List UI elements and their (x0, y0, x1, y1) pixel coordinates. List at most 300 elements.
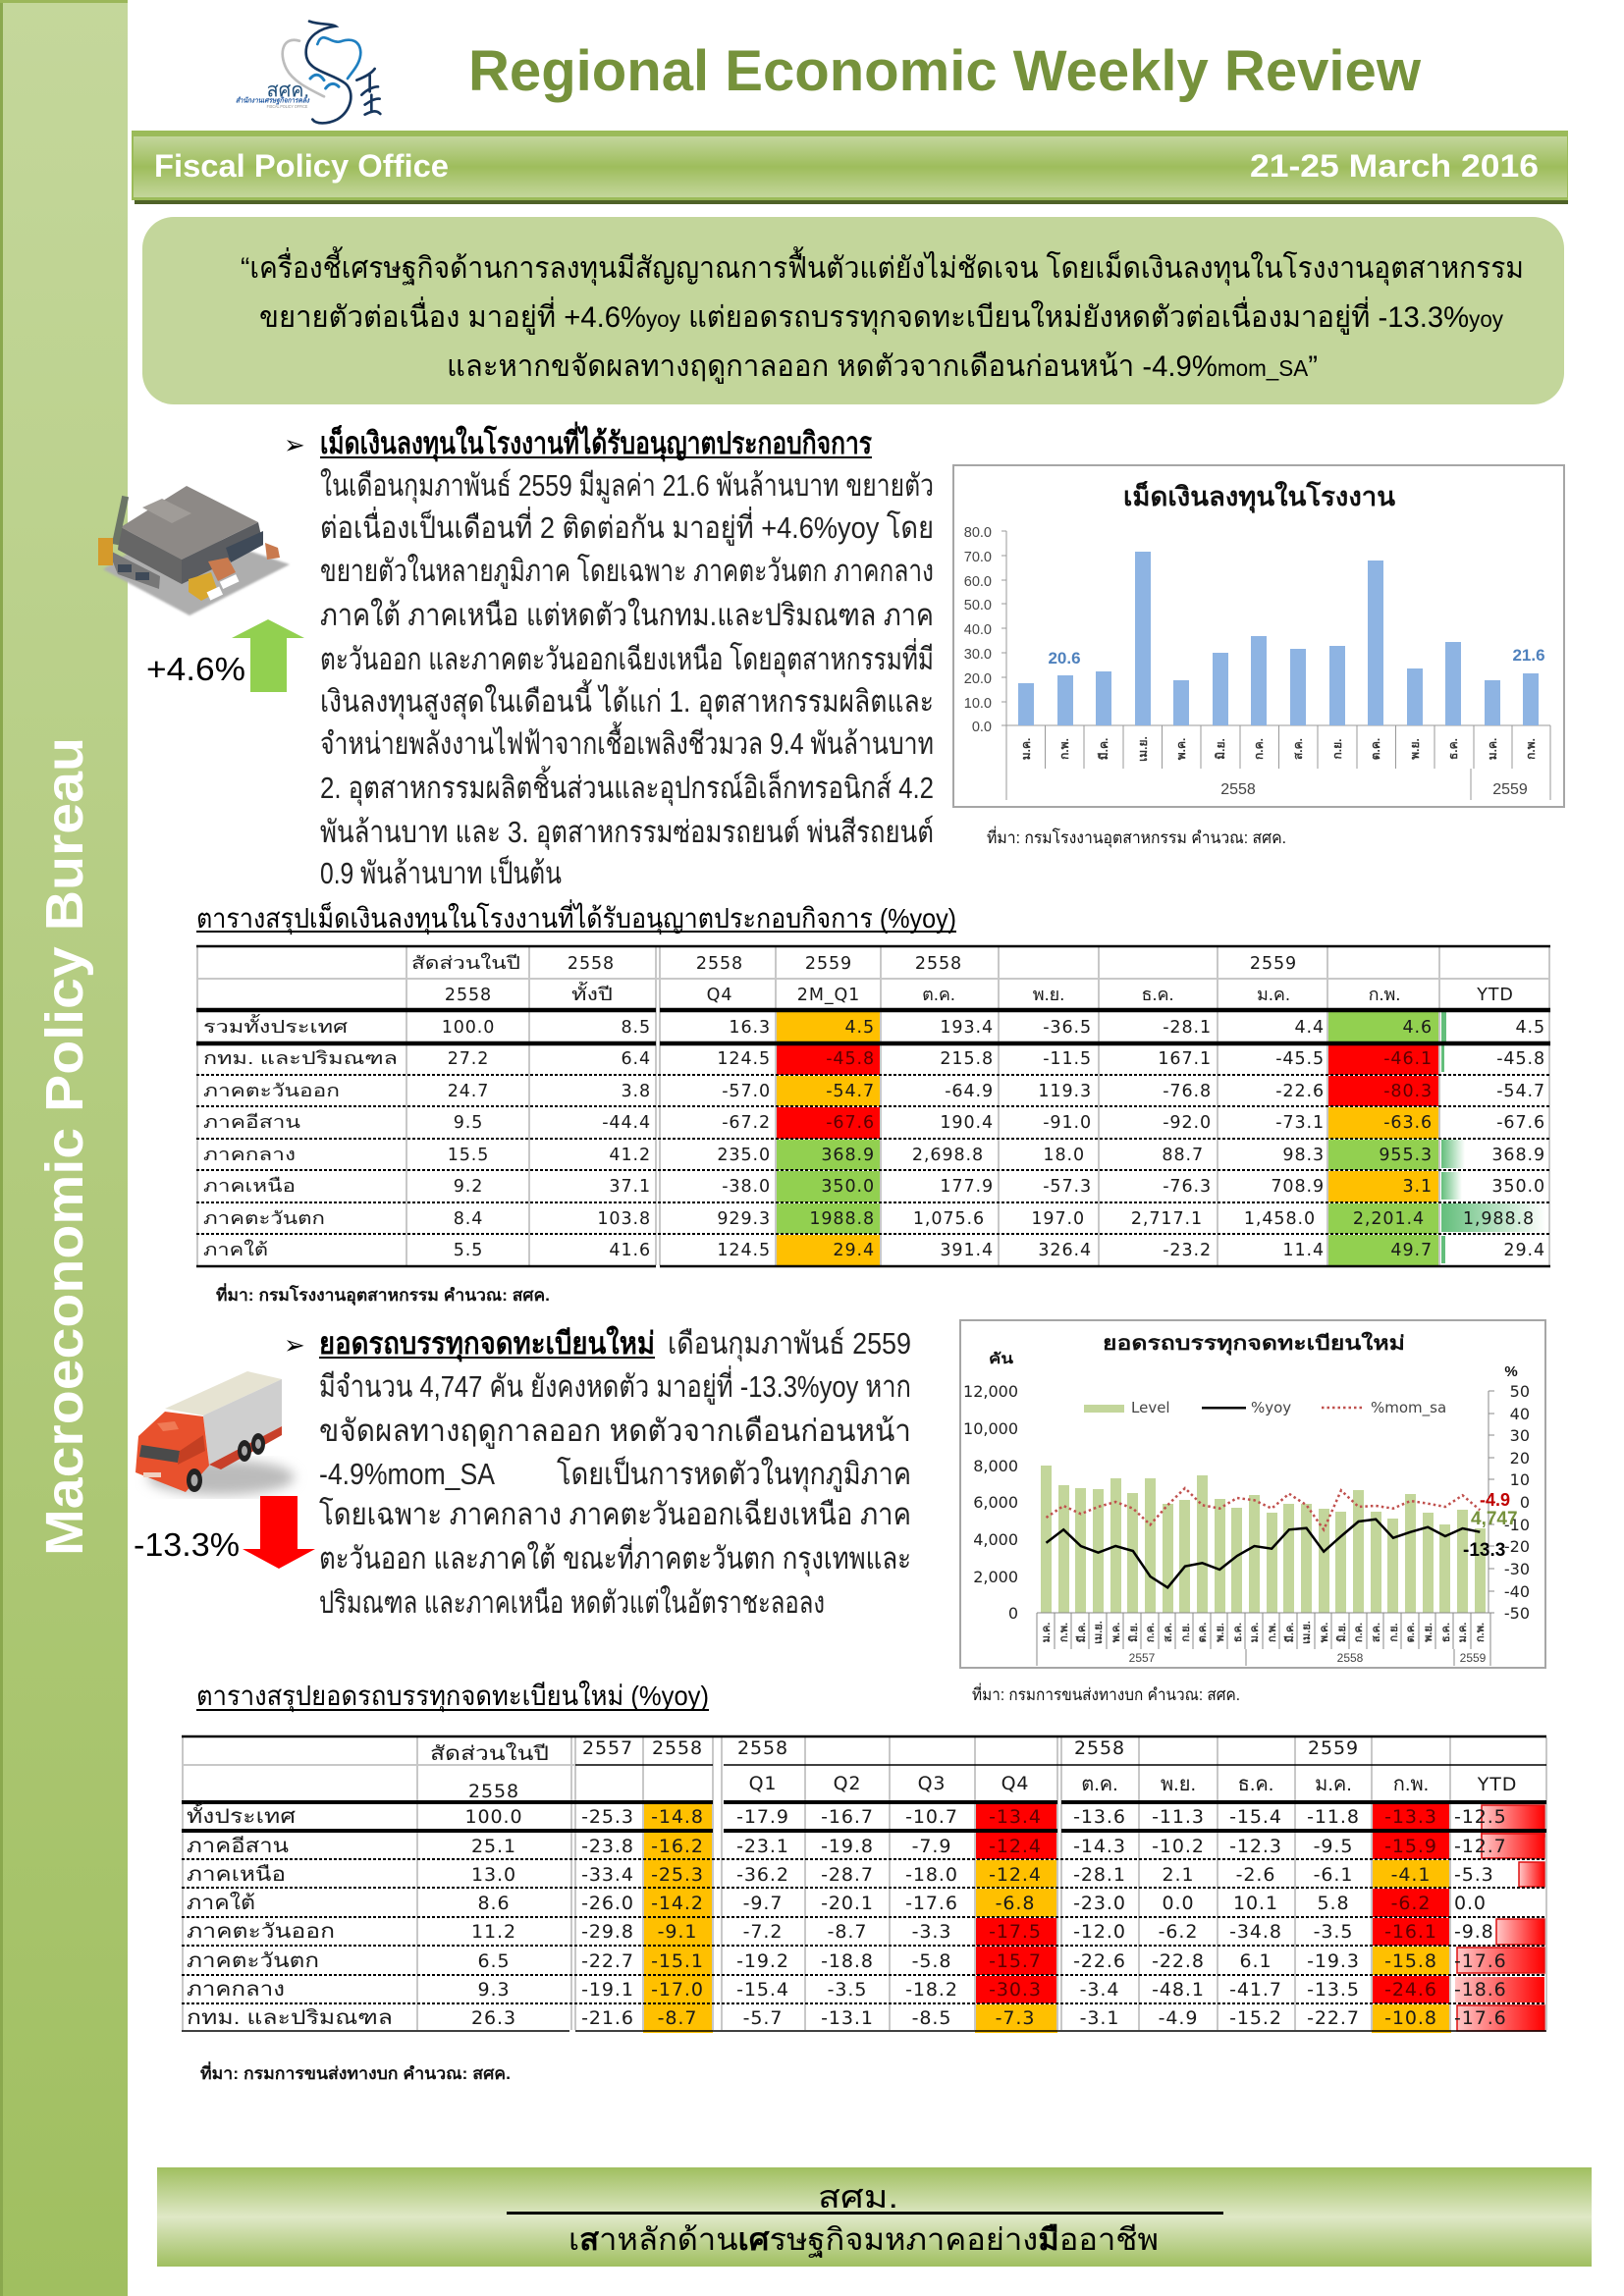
row: West: 8.4 (454, 1209, 483, 1229)
row: West: -19.2 (736, 1950, 789, 1972)
row: West: -22.8 (1152, 1950, 1205, 1972)
month labels: มิ.ย. (1335, 1623, 1348, 1642)
row: whole country: ทั้งประเทศ (187, 1802, 296, 1828)
y axis labels: 40.0 (964, 622, 992, 638)
bars (1018, 552, 1539, 725)
row: West (203, 1208, 1535, 1229)
row: South: -14.2 (651, 1893, 704, 1914)
row: South: ภาคใต้ (203, 1239, 268, 1259)
chart: factory investment (953, 465, 1564, 807)
row: South: 29.4 (833, 1241, 875, 1260)
header rows: 2558 (445, 986, 492, 1005)
row: East: -29.8 (581, 1921, 634, 1943)
month labels: เม.ย. (1136, 736, 1150, 762)
row: Bangkok: -22.7 (1307, 2007, 1360, 2029)
month labels: มี.ค. (1097, 738, 1110, 760)
row: Northeast: -12.4 (989, 1836, 1042, 1857)
row: Central: -17.0 (651, 1979, 704, 2001)
row: Northeast: -14.3 (1073, 1836, 1126, 1857)
month labels: พ.ย. (1423, 1623, 1435, 1642)
row: Central: 98.3 (1282, 1146, 1325, 1165)
row: North: 13.0 (471, 1864, 516, 1886)
body text: ตะวันออก และภาคตะวันออกเฉียงเหนือ โดยอุตสาหกรรมที่มี (320, 638, 934, 678)
body text (320, 468, 934, 890)
row: Bangkok: 6.4 (621, 1049, 651, 1069)
row: South: 0.0 (1454, 1893, 1487, 1914)
row: Northeast: -44.4 (602, 1113, 651, 1133)
body text: ในเดือนกุมภาพันธ์ 2559 มีมูลค่า 21.6 พันล้านบาท ขยายตัว (320, 468, 934, 505)
row: Central (203, 1145, 1545, 1165)
right axis labels: -50 (1504, 1604, 1530, 1623)
month labels: ม.ค. (1486, 738, 1499, 760)
month labels: ธ.ค. (1440, 1623, 1452, 1642)
row: whole country: -16.7 (821, 1806, 874, 1828)
row: Bangkok: กทม. และปริมณฑล (203, 1048, 398, 1068)
chart: factory investment: 2559 (1492, 781, 1528, 798)
header rows: Q3 (918, 1773, 946, 1794)
row: Central: 41.2 (609, 1146, 651, 1165)
row: Central: -24.6 (1384, 1979, 1437, 2001)
line: %mom_sa (1047, 1488, 1480, 1529)
row: whole country: -14.8 (651, 1806, 704, 1828)
row: South: -17.6 (905, 1893, 958, 1914)
left unit: คัน (989, 1351, 1014, 1367)
body text: ขยายตัวในหลายภูมิภาค โดยเฉพาะ ภาคตะวันตก ภาคกลาง (320, 554, 934, 589)
month labels: ม.ค. (1019, 738, 1033, 760)
header rows: ก.พ. (1393, 1774, 1429, 1795)
row: whole country: 100.0 (442, 1018, 495, 1038)
row: whole country: -11.8 (1307, 1806, 1360, 1828)
month labels: มิ.ย. (1127, 1623, 1140, 1642)
month labels (1019, 736, 1538, 762)
month labels: พ.ค. (1174, 738, 1188, 760)
row: West: 197.0 (1031, 1209, 1085, 1229)
row: Northeast: -16.2 (651, 1836, 704, 1857)
header rows: 2558 (468, 1781, 519, 1802)
callout summary: “เครื่องชี้เศรษฐกิจด้านการลงทุนมีสัญญาณการฟื้นตัวแต่ยังไม่ชัดเจน โดยเม็ดเงินลงทุนในโรงงานอุตสาหกรรม (241, 246, 1524, 287)
header rows: YTD (1476, 986, 1514, 1005)
line: %yoy (1047, 1520, 1480, 1587)
row: North: -57.3 (1043, 1177, 1092, 1197)
header rows: YTD (1477, 1774, 1517, 1795)
row: East: -12.0 (1073, 1921, 1126, 1943)
data labels: -4.9 (1480, 1490, 1510, 1510)
row: Northeast: -10.2 (1152, 1836, 1205, 1857)
row: Bangkok: กทม. และปริมณฑล (187, 2007, 393, 2029)
row: East: 24.7 (448, 1082, 489, 1101)
row: South: ภาคใต้ (187, 1892, 255, 1914)
body text: 2. อุตสาหกรรมผลิตชิ้นส่วนและอุปกรณ์อิเล็กทรอนิกส์ 4.2 (320, 766, 934, 807)
body text: ต่อเนื่องเป็นเดือนที่ 2 ติดต่อกัน มาอยู่ที่ +4.6%yoy โดย (320, 507, 934, 546)
chart: new truck registrations: -13.3 (1463, 1540, 1505, 1561)
month labels: ม.ค. (1041, 1623, 1053, 1642)
heading: ยอดรถบรรทุกจดทะเบียนใหม่ (319, 1325, 655, 1362)
month labels: ก.ย. (1388, 1623, 1400, 1642)
row: North: 350.0 (821, 1177, 875, 1197)
right unit: % (1504, 1363, 1518, 1380)
row: West: -22.7 (581, 1950, 634, 1972)
row: North: -33.4 (581, 1864, 634, 1886)
row: Northeast: -67.2 (722, 1113, 771, 1133)
row: Central: 18.0 (1043, 1146, 1085, 1165)
row: North: -36.2 (736, 1864, 789, 1886)
header rows: Q2 (834, 1773, 861, 1794)
row: South: 10.1 (1233, 1893, 1278, 1914)
header rows: พ.ย. (1161, 1774, 1196, 1795)
chart: new truck registrations: 2559 (1460, 1651, 1487, 1665)
section: factory investment text (284, 421, 934, 890)
row: East: -34.8 (1229, 1921, 1282, 1943)
row: North: -12.4 (989, 1864, 1042, 1886)
month labels: ก.พ. (1267, 1623, 1278, 1642)
row: East: -22.6 (1275, 1082, 1325, 1101)
row: Bangkok: 124.5 (717, 1049, 771, 1069)
row: South: 391.4 (940, 1241, 994, 1260)
row: whole country: รวมทั้งประเทศ (203, 1014, 349, 1037)
bullet: ➢ (284, 431, 305, 460)
row: East: 119.3 (1038, 1082, 1092, 1101)
highlighted cells (775, 1012, 1546, 1266)
month labels: ก.พ. (1058, 1623, 1070, 1642)
row: whole country: -10.7 (905, 1806, 958, 1828)
right axis labels: 0 (1520, 1493, 1530, 1512)
month labels: ส.ค. (1291, 738, 1305, 760)
row: East: ภาคตะวันออก (203, 1081, 340, 1100)
row: Bangkok: 215.8 (940, 1049, 994, 1069)
month labels: ก.ค. (1353, 1623, 1365, 1642)
callout summary (142, 217, 1564, 404)
row: South: 11.4 (1282, 1241, 1325, 1260)
row: Northeast: -63.6 (1383, 1113, 1433, 1133)
row: East: -6.2 (1159, 1921, 1198, 1943)
row: South: -6.8 (996, 1893, 1035, 1914)
footer slogan: เสาหลักด้านเศรษฐกิจมหภาคอย่าง มืออาชีพ (568, 2222, 1159, 2258)
icon: red down arrow (243, 1496, 315, 1569)
sidebar title: Macroeconomic Policy Bureau (35, 737, 94, 1556)
header rows: 2558 (652, 1737, 703, 1759)
row: East: -54.7 (826, 1082, 875, 1101)
row: Northeast: -9.5 (1314, 1836, 1353, 1857)
header rows: ต.ค. (1081, 1774, 1118, 1795)
date: 21-25 March 2016 (1250, 148, 1539, 184)
row: Bangkok: -3.1 (1080, 2007, 1119, 2029)
chart source: ที่มา: กรมการขนส่งทางบก คำนวณ: สศค. (972, 1682, 1240, 1704)
row: Northeast: -92.0 (1163, 1113, 1212, 1133)
value: -13.3%: -13.3% (134, 1526, 240, 1563)
row: Bangkok (187, 2007, 1507, 2029)
row: Central: 15.5 (448, 1146, 489, 1165)
row: West: -18.8 (821, 1950, 874, 1972)
left axis labels: 10,000 (963, 1419, 1018, 1438)
row: whole country: 4.5 (844, 1018, 875, 1038)
header bar (132, 131, 1568, 204)
body text: มีจำนวน 4,747 คัน ยังคงหดตัว มาอยู่ที่ -13.3%yoy หาก (319, 1365, 911, 1405)
row: whole country: -28.1 (1163, 1018, 1212, 1038)
row: whole country: 8.5 (621, 1018, 651, 1038)
row: West: 2,201.4 (1353, 1209, 1425, 1229)
title: Regional Economic Weekly Review (468, 39, 1422, 103)
row: North: 37.1 (609, 1177, 651, 1197)
grid (197, 947, 1549, 1265)
row: Bangkok: -45.5 (1275, 1049, 1325, 1069)
body text (319, 1326, 911, 1620)
row: East (187, 1921, 1494, 1943)
row: Central: 9.3 (478, 1979, 510, 2001)
header rows: ม.ค. (1257, 985, 1290, 1004)
month labels: มิ.ย. (1214, 738, 1227, 760)
row: West: -15.1 (651, 1950, 704, 1972)
row: East: ภาคตะวันออก (187, 1921, 335, 1943)
chart source: ที่มา: กรมโรงงานอุตสาหกรรม คำนวณ: สศค. (987, 826, 1286, 848)
right axis labels: -20 (1504, 1537, 1530, 1556)
year labels: 2557 (1129, 1651, 1156, 1665)
row: Bangkok: -15.2 (1229, 2007, 1282, 2029)
y axis labels: 0.0 (972, 720, 992, 735)
row: North: 3.1 (1402, 1177, 1433, 1197)
row: whole country: 4.4 (1294, 1018, 1325, 1038)
header rows: ทั้งปี (571, 982, 613, 1004)
row: whole country: 100.0 (465, 1806, 522, 1828)
chart: new truck registrations (960, 1320, 1545, 1668)
row: East: -80.3 (1383, 1082, 1433, 1101)
row: South: 5.5 (454, 1241, 483, 1260)
row: Bangkok: -46.1 (1383, 1049, 1433, 1069)
row: Bangkok: 167.1 (1158, 1049, 1212, 1069)
row: East: -57.0 (722, 1082, 771, 1101)
row: Bangkok: 26.3 (471, 2007, 516, 2029)
row: South (203, 1239, 1545, 1260)
header rows: 2558 (1074, 1737, 1125, 1759)
row: North: 350.0 (1491, 1177, 1545, 1197)
footer band (157, 2167, 1592, 2267)
month labels: ก.พ. (1475, 1623, 1487, 1642)
row: West: 6.5 (478, 1950, 510, 1972)
row: Central: 955.3 (1379, 1146, 1433, 1165)
month labels: พ.ย. (1215, 1623, 1226, 1642)
row: Bangkok: -45.8 (826, 1049, 875, 1069)
row: Central (187, 1979, 1507, 2001)
bullet: ➢ (284, 1331, 305, 1361)
row: East (203, 1081, 1545, 1101)
body text: จำหน่ายพลังงานไฟฟ้าจากเชื้อเพลิงชีวมวล 9.4 พันล้านบาท (320, 721, 934, 761)
row: East: -9.1 (658, 1921, 697, 1943)
row: North: 177.9 (940, 1177, 994, 1197)
row: West: ภาคตะวันตก (187, 1950, 319, 1972)
row: Northeast: -23.8 (581, 1836, 634, 1857)
highlighted cells (643, 1804, 1451, 2033)
row: East: -76.8 (1163, 1082, 1212, 1101)
left axis labels: 8,000 (973, 1457, 1018, 1475)
row: North: -2.6 (1236, 1864, 1275, 1886)
row: Northeast (187, 1836, 1507, 1857)
row: whole country: -13.3 (1384, 1806, 1437, 1828)
month labels: ส.ค. (1163, 1623, 1174, 1642)
row: East: -3.3 (912, 1921, 951, 1943)
row: Northeast: -15.9 (1384, 1836, 1437, 1857)
row: South: 124.5 (717, 1241, 771, 1260)
row: Central: -41.7 (1229, 1979, 1282, 2001)
row: South: 41.6 (609, 1241, 651, 1260)
row: North: ภาคเหนือ (187, 1864, 286, 1886)
row: North (187, 1864, 1494, 1886)
right axis labels: -30 (1504, 1560, 1530, 1578)
header rows: 2559 (805, 954, 852, 974)
month labels: ธ.ค. (1232, 1623, 1244, 1642)
y axis labels: 30.0 (964, 647, 992, 663)
grid (183, 1737, 1546, 2030)
body text: เงินลงทุนสูงสุดในเดือนนี้ ได้แก่ 1. อุตสาหกรรมผลิตและ (320, 679, 934, 721)
header rows: ม.ค. (1315, 1774, 1352, 1795)
table source: ที่มา: กรมการขนส่งทางบก คำนวณ: สศค. (200, 2061, 511, 2083)
left axis labels: 4,000 (973, 1530, 1018, 1549)
row: East: -7.2 (743, 1921, 783, 1943)
row: Bangkok: -4.9 (1159, 2007, 1198, 2029)
row: South: -23.2 (1163, 1241, 1212, 1260)
row: South: 49.7 (1390, 1241, 1433, 1260)
row: North: -25.3 (651, 1864, 704, 1886)
body text: -4.9%mom_SA (319, 1457, 495, 1491)
left axis labels: 2,000 (973, 1568, 1018, 1586)
row: Northeast (203, 1112, 1545, 1133)
row: Northeast: -7.9 (912, 1836, 951, 1857)
row: whole country: -25.3 (581, 1806, 634, 1828)
y axis labels: 70.0 (964, 550, 992, 565)
row: West: 1,075.6 (913, 1209, 985, 1229)
month labels: ต.ค. (1197, 1623, 1209, 1642)
row: West: -15.8 (1384, 1950, 1437, 1972)
row: Northeast: 9.5 (454, 1113, 483, 1133)
chart: new truck registrations: 2558 (1337, 1651, 1364, 1665)
row: South: 8.6 (478, 1893, 510, 1914)
month labels: เม.ย. (1093, 1621, 1105, 1644)
row: West: -15.7 (989, 1950, 1042, 1972)
icon: green up arrow (232, 619, 304, 692)
body text: โดยเป็นการหดตัวในทุกภูมิภาค (557, 1456, 911, 1493)
row: Northeast: 25.1 (471, 1836, 516, 1857)
row: North: -5.3 (1454, 1864, 1494, 1886)
header rows: Q4 (1001, 1773, 1029, 1794)
row: Central: -30.3 (989, 1979, 1042, 2001)
right axis labels (1504, 1382, 1530, 1623)
row: Bangkok: -8.7 (658, 2007, 697, 2029)
left axis labels: 12,000 (963, 1382, 1018, 1401)
month labels: มี.ค. (1283, 1623, 1296, 1642)
row: whole country: -15.4 (1229, 1806, 1282, 1828)
row: South: -6.2 (1391, 1893, 1431, 1914)
row: Northeast: -19.8 (821, 1836, 874, 1857)
chart title: เม็ดเงินลงทุนในโรงงาน (1123, 479, 1396, 513)
row: Northeast: 190.4 (940, 1113, 994, 1133)
bars (1041, 1466, 1486, 1613)
row: Bangkok: -8.5 (912, 2007, 951, 2029)
row: East: -8.7 (828, 1921, 867, 1943)
YTD data bars (1455, 1805, 1544, 2031)
logo (233, 14, 386, 133)
header rows: 2558 (915, 954, 962, 974)
month labels: มี.ค. (1075, 1623, 1088, 1642)
header rows: 2558 (568, 954, 615, 974)
row: Central: -48.1 (1152, 1979, 1205, 2001)
row: West: 1,458.0 (1244, 1209, 1316, 1229)
month labels: พ.ค. (1319, 1623, 1330, 1642)
body text: ปริมณฑล และภาคเหนือ หดตัวแต่ในอัตราชะลอลง (319, 1585, 825, 1620)
right axis labels: 10 (1510, 1470, 1530, 1489)
row: Bangkok: -11.5 (1043, 1049, 1092, 1069)
body text: เดือนกุมภาพันธ์ 2559 (668, 1326, 911, 1362)
row: Central: -19.1 (581, 1979, 634, 2001)
header rows (411, 952, 1514, 1005)
legend: %mom_sa (1371, 1399, 1446, 1417)
month labels: ธ.ค. (1446, 738, 1460, 760)
logo: สศค. (267, 79, 309, 101)
row: North: -6.1 (1314, 1864, 1353, 1886)
row: Central: 368.9 (821, 1146, 875, 1165)
row: North: -18.0 (905, 1864, 958, 1886)
row: East: -64.9 (945, 1082, 994, 1101)
year labels: 2558 (1220, 781, 1256, 798)
header rows: สัดส่วนในปี (411, 952, 520, 973)
row: East: 3.8 (621, 1082, 651, 1101)
y axis labels: 10.0 (964, 696, 992, 712)
data labels: 20.6 (1048, 649, 1081, 667)
legend: %yoy (1251, 1399, 1291, 1416)
month labels: ม.ค. (1249, 1623, 1261, 1642)
row: West (187, 1950, 1507, 1972)
row: South: 0.0 (1163, 1893, 1194, 1914)
header rows: พ.ย. (1033, 985, 1064, 1004)
month labels: เม.ย. (1301, 1621, 1313, 1644)
row: Northeast: ภาคอีสาน (187, 1836, 289, 1857)
row: East: -17.5 (989, 1921, 1042, 1943)
footer acronym: สศม. (818, 2179, 898, 2215)
chart: new truck registrations: 4,747 (1471, 1509, 1518, 1529)
header rows: 2559 (1250, 954, 1297, 974)
month labels (1041, 1621, 1487, 1644)
table source: ที่มา: กรมโรงงานอุตสาหกรรม คำนวณ: สศค. (216, 1283, 550, 1306)
y axis labels: 20.0 (964, 671, 992, 687)
row: West: 103.8 (597, 1209, 651, 1229)
icon: truck (135, 1371, 295, 1495)
right axis labels: -40 (1504, 1582, 1530, 1601)
y axis labels: 60.0 (964, 574, 992, 590)
row: Central: ภาคกลาง (203, 1145, 296, 1164)
row: East: -54.7 (1496, 1082, 1545, 1101)
row: Northeast: -91.0 (1043, 1113, 1092, 1133)
callout summary: ขยายตัวต่อเนื่อง มาอยู่ที่ +4.6%yoy แต่ยอดรถบรรทุกจดทะเบียนใหม่ยังหดตัวต่อเนื่องมาอยู่ที่ -13.3%yoy (259, 296, 1503, 336)
header rows: สัดส่วนในปี (430, 1742, 549, 1765)
table title: factory investment: ตารางสรุปเม็ดเงินลงทุนในโรงงานที่ได้รับอนุญาตประกอบกิจการ (%yoy) (196, 899, 956, 935)
row: West: 1,988.8 (1463, 1209, 1535, 1229)
section: new truck registration text (284, 1325, 911, 1620)
y axis labels: 80.0 (964, 525, 992, 541)
header rows (430, 1737, 1517, 1802)
body text: ภาคใต้ ภาคเหนือ แต่หดตัวในกทม.และปริมณฑล ภาค (320, 598, 934, 632)
row: Central: -18.2 (905, 1979, 958, 2001)
row: West: 1988.8 (809, 1209, 875, 1229)
row: North: -76.3 (1163, 1177, 1212, 1197)
row: Bangkok: -45.8 (1496, 1049, 1545, 1069)
row: Northeast: -67.6 (1496, 1113, 1545, 1133)
row: South: -20.1 (821, 1893, 874, 1914)
month labels: พ.ย. (1408, 738, 1422, 760)
row: whole country: 4.5 (1515, 1018, 1545, 1038)
month labels: ก.พ. (1524, 738, 1538, 760)
body text: ขจัดผลทางฤดูกาลออก หดตัวจากเดือนก่อนหน้า (319, 1414, 911, 1449)
row: South (187, 1892, 1487, 1914)
row: West: 929.3 (717, 1209, 771, 1229)
legend: Level (1131, 1399, 1170, 1416)
axes (1037, 1391, 1494, 1666)
